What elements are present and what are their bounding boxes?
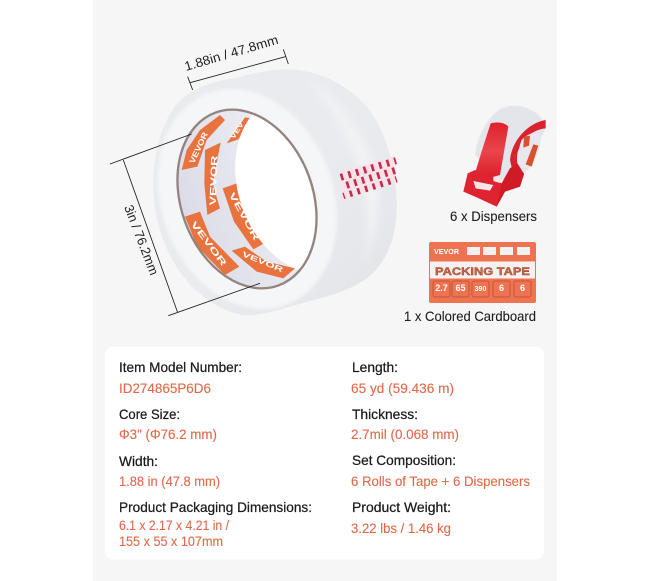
cardboard stat values: 65 [455, 283, 466, 293]
cardboard stat values: 6 [520, 283, 525, 293]
colored cardboard [429, 242, 536, 303]
tape roll body [153, 69, 397, 315]
label: bottom: VEVOR [241, 250, 286, 275]
spec: length: 65 yd (59.436 m) [351, 380, 454, 396]
cardboard base [429, 242, 536, 303]
core ring [154, 90, 340, 308]
spec: width [119, 453, 220, 489]
dispenser tape roll [475, 106, 546, 180]
dispenser red base [463, 163, 524, 207]
cardboard title strip [430, 262, 535, 278]
dispenser core [519, 133, 541, 173]
card background [105, 347, 544, 560]
spec: product weight: 3.22 lbs / 1.46 kg [351, 520, 451, 536]
spec: set composition [351, 452, 530, 489]
cardboard caption: 1 x Colored Cardboard [404, 308, 536, 324]
core inner wall [154, 90, 340, 308]
label: center right [223, 183, 267, 249]
spec: set composition: 6 Rolls of Tape + 6 Dispensers [351, 473, 530, 489]
height dimension line [110, 134, 260, 316]
dispenser [463, 106, 546, 207]
spec: packaging dimensions: 155 x 55 x 107mm [119, 533, 223, 549]
label: lower left [185, 212, 239, 275]
label: bottom [232, 247, 295, 278]
dispenser core labels [523, 136, 538, 167]
label: left upper: VEVOR [188, 131, 210, 165]
spec: core size: Core Size: [119, 406, 180, 422]
width dimension line [188, 49, 288, 90]
dispenser red handle [475, 122, 508, 180]
label: center left [204, 143, 221, 215]
spec: length: Length: [352, 359, 398, 375]
dispenser base shade [497, 163, 524, 207]
spec: core size: Φ3" (Φ76.2 mm) [119, 426, 217, 442]
spec: packaging dimensions: 6.1 x 2.17 x 4.21 in / [119, 517, 229, 533]
width dimension label: 1.88in / 47.8mm [183, 32, 280, 74]
cardboard title: PACKING TAPE [435, 266, 530, 278]
spec: packaging dimensions: Product Packaging Dimensions: [119, 499, 312, 515]
label: center right: VEVOR [227, 190, 262, 243]
height dimension label: 3in / 76.2mm [121, 203, 162, 277]
spec: set composition: Set Composition: [352, 452, 456, 468]
label: center left: VEVOR [208, 155, 219, 206]
cardboard brand: VEVOR [434, 247, 460, 256]
tape roll [110, 49, 402, 334]
spec: thickness: Thickness: [352, 406, 418, 422]
spec: thickness: 2.7mil (0.068 mm) [351, 426, 459, 442]
specifications card [105, 347, 544, 560]
label: lower left: VEVOR [189, 219, 230, 269]
spec: length [351, 359, 454, 396]
cardboard stat values: 390 [475, 286, 486, 293]
spec: width: 1.88 in (47.8 mm) [119, 473, 220, 489]
cardboard stat values: 2.7 [435, 283, 448, 293]
red tick print band [340, 156, 397, 201]
cardboard stat values: 6 [499, 283, 504, 293]
spec: model number: ID274865P6D6 [119, 380, 211, 396]
label: top [226, 117, 250, 144]
dispenser slots [473, 177, 502, 191]
tape front face [128, 64, 367, 334]
spec: model number [119, 359, 242, 396]
spec: model number: Item Model Number: [119, 359, 242, 375]
spec: product weight: Product Weight: [352, 499, 451, 515]
cardboard stat boxes [433, 281, 531, 297]
background panel [93, 0, 557, 581]
spec: product weight [351, 499, 451, 536]
spec: thickness [351, 406, 459, 442]
label: top: VEV [230, 121, 246, 140]
label: left upper [182, 115, 225, 170]
dispenser red rim [510, 120, 546, 175]
side highlight [307, 80, 379, 263]
VEVOR core labels [182, 115, 316, 278]
spec: core size [119, 406, 217, 442]
cardboard badges [467, 247, 530, 255]
dispenser caption: 6 x Dispensers [450, 208, 537, 224]
hole opening [235, 115, 316, 270]
spec: packaging dimensions [119, 499, 312, 549]
spec: width: Width: [119, 453, 158, 469]
cardboard stat values [435, 283, 525, 293]
